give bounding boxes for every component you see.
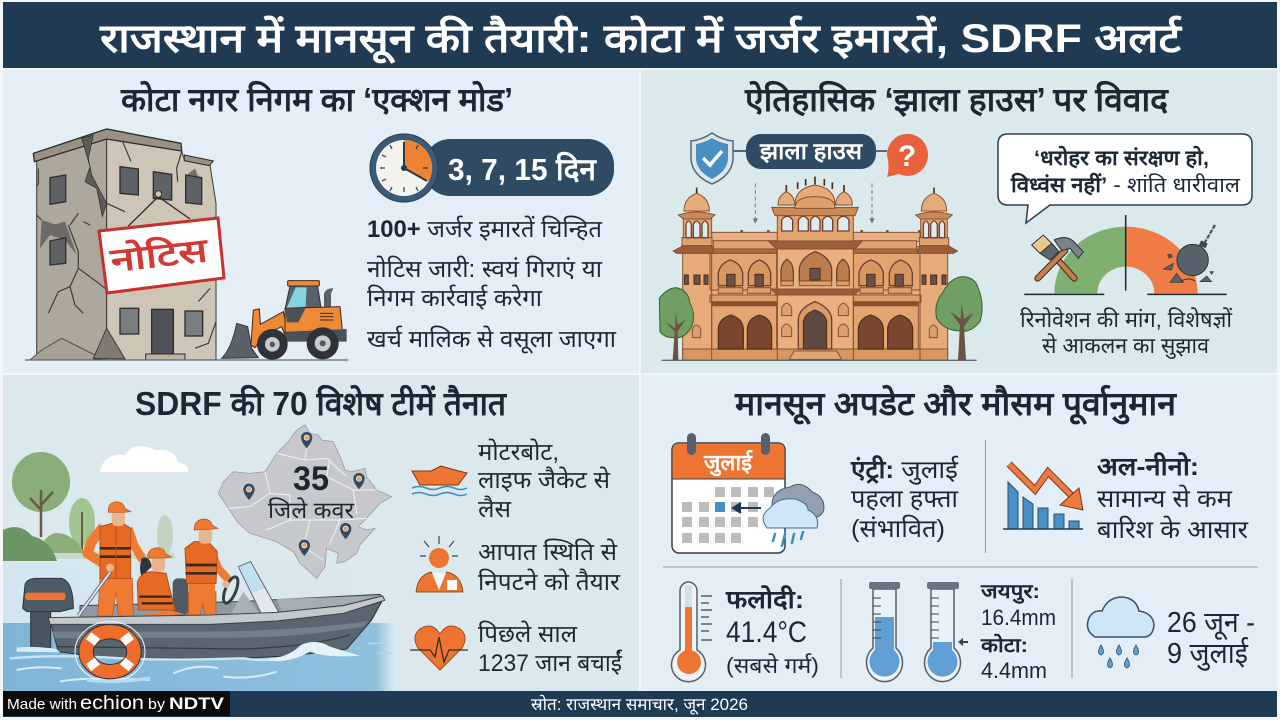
waves and foam <box>10 642 393 682</box>
boat hull <box>48 596 385 658</box>
label row: shield, pill, question: झाला हाउस <box>759 138 864 164</box>
item: emergency readiness: निपटने को तैयार <box>478 568 621 596</box>
text: notice issued: निगम कार्रवाई करेगा <box>367 284 543 312</box>
text: Jaipur and Kota rainfall: कोटा: <box>980 633 1028 657</box>
clock and days pill: 3, 7, 15 दिन <box>448 151 598 187</box>
badge: made with echion by NDTV: by <box>148 697 166 713</box>
chart: renovation vs demolition arch <box>1024 215 1227 294</box>
badge: made with echion by NDTV: NDTV <box>169 694 225 713</box>
text: monsoon entry: एंट्री: जुलाई <box>850 455 959 485</box>
title banner: राजस्थान में मानसून की तैयारी: कोटा में जर्जर इमारतें, SDRF अलर्ट <box>99 15 1183 64</box>
text: notice issued <box>367 255 603 312</box>
badge: made with echion by NDTV <box>3 691 230 716</box>
text: Phalodi temperature: फलोदी: <box>725 585 804 614</box>
text: notice issued: नोटिस जारी: स्वयं गिराएं या <box>367 255 603 283</box>
chart: El Nino declining rainfall <box>1003 464 1083 529</box>
person: seated crew <box>137 548 185 616</box>
text: Jaipur and Kota rainfall: 4.4mm <box>981 658 1047 683</box>
text: renovation demand <box>1020 307 1232 359</box>
item: lives saved <box>410 620 623 677</box>
text: Phalodi temperature: (सबसे गर्म) <box>726 653 819 678</box>
icon: July calendar with rain cloud: जुलाई <box>703 449 753 477</box>
trees <box>659 288 693 338</box>
footer source bar: स्रोत: राजस्थान समाचार, जून 2026 <box>531 694 748 715</box>
icon: rain gauge tubes <box>866 582 968 682</box>
map label: 35 districts covered <box>268 460 355 523</box>
notice sign: नोटिस <box>107 230 211 279</box>
badge: made with echion by NDTV: Made with <box>7 697 77 713</box>
text: Jaipur and Kota rainfall <box>980 581 1056 683</box>
text: monsoon dates: 9 जुलाई <box>1167 637 1249 671</box>
outboard motor <box>23 578 73 647</box>
item: motorboat and life jackets: लैस <box>478 495 512 523</box>
sky openings <box>686 216 945 238</box>
icon: bulldozer <box>222 281 347 360</box>
map label: 35 districts covered: जिले कवर <box>268 497 355 523</box>
heading: action mode: कोटा नगर निगम का ‘एक्शन मोड’ <box>120 80 513 118</box>
label row: shield, pill, question <box>691 133 928 184</box>
notice sign <box>99 218 224 293</box>
panel: Kota municipal action mode <box>3 70 639 373</box>
item: emergency readiness <box>416 536 621 596</box>
panel: SDRF teams <box>3 375 639 691</box>
bay arches <box>718 252 912 286</box>
footer source bar <box>3 691 1277 717</box>
text: Jaipur and Kota rainfall: 16.4mm <box>981 605 1056 630</box>
callout: Shanti Dhariwal quote: ‘धरोहर का संरक्षण हो, <box>1034 145 1209 170</box>
illustration: Jhala House palace <box>659 177 982 360</box>
illustration: trees and cloud backdrop <box>3 446 188 561</box>
title banner <box>3 2 1277 68</box>
text: El Nino <box>1097 452 1249 544</box>
label row: shield, pill, question: ? <box>898 140 916 173</box>
heading: monsoon update: मानसून अपडेट और मौसम पूर्वानुमान <box>734 384 1178 425</box>
palace main body <box>683 247 948 360</box>
icon: life ring <box>75 622 150 682</box>
item: emergency readiness: आपात स्थिति से <box>478 538 618 566</box>
item: lives saved: 1237 जान बचाईं <box>478 649 623 677</box>
text: renovation demand: से आकलन का सुझाव <box>1042 333 1210 359</box>
finials <box>697 177 934 193</box>
text: El Nino: सामान्य से कम <box>1097 484 1233 513</box>
heading: Jhala House: ऐतिहासिक ‘झाला हाउस’ पर विवाद <box>744 80 1170 118</box>
text: Jaipur and Kota rainfall: जयपुर: <box>980 581 1040 604</box>
panel: monsoon update and forecast <box>641 375 1277 691</box>
icon: hammer and brush <box>1032 235 1083 278</box>
text: monsoon entry <box>850 455 959 543</box>
icon: rain cloud with drops <box>1087 597 1154 668</box>
text: monsoon entry: पहला हफ्ता <box>851 485 959 513</box>
person: standing crew <box>78 502 143 616</box>
callout: Shanti Dhariwal quote: विध्वंस नहीं’ - शांति धारीवाल <box>1010 172 1241 197</box>
item: motorboat and life jackets: लाइफ जैकेट से <box>478 466 611 494</box>
text: cost recovery: खर्च मालिक से वसूला जाएगा <box>367 325 617 354</box>
text: El Nino: अल-नीनो: <box>1097 452 1199 481</box>
item: motorboat and life jackets: मोटरबोट, <box>478 438 559 466</box>
text: Phalodi temperature: 41.4°C <box>726 616 807 649</box>
text: buildings identified: 100+ जर्जर इमारतें चिन्हित <box>367 215 603 243</box>
item: motorboat and life jackets <box>412 438 611 523</box>
text: Phalodi temperature <box>725 585 819 678</box>
badge: made with echion by NDTV: echion <box>80 693 144 714</box>
ground arches <box>718 315 913 349</box>
heading: SDRF teams: SDRF की 70 विशेष टीमें तैनात <box>135 384 507 422</box>
text: monsoon entry: (संभावित) <box>851 514 945 543</box>
icon: wrecking ball <box>1163 225 1215 282</box>
text: El Nino: बारिश के आसार <box>1097 515 1249 544</box>
illustration: water <box>3 561 395 691</box>
icon: July calendar with rain cloud <box>672 433 824 553</box>
text: monsoon dates <box>1167 607 1255 671</box>
map: Rajasthan districts <box>218 425 392 578</box>
panel: Jhala House controversy <box>641 70 1277 373</box>
illustration: cracked building <box>25 129 348 360</box>
map label: 35 districts covered: 35 <box>293 460 329 498</box>
person: driving crew <box>185 519 241 616</box>
text: renovation demand: रिनोवेशन की मांग, विशेषज्ञों <box>1020 307 1232 332</box>
text: monsoon dates: 26 जून - <box>1167 607 1255 640</box>
icon: thermometer <box>672 582 712 682</box>
clock and days pill <box>370 134 614 202</box>
item: lives saved: पिछले साल <box>478 620 578 648</box>
callout: Shanti Dhariwal quote <box>998 134 1252 223</box>
illustration: rescue boat and crew <box>10 502 393 682</box>
